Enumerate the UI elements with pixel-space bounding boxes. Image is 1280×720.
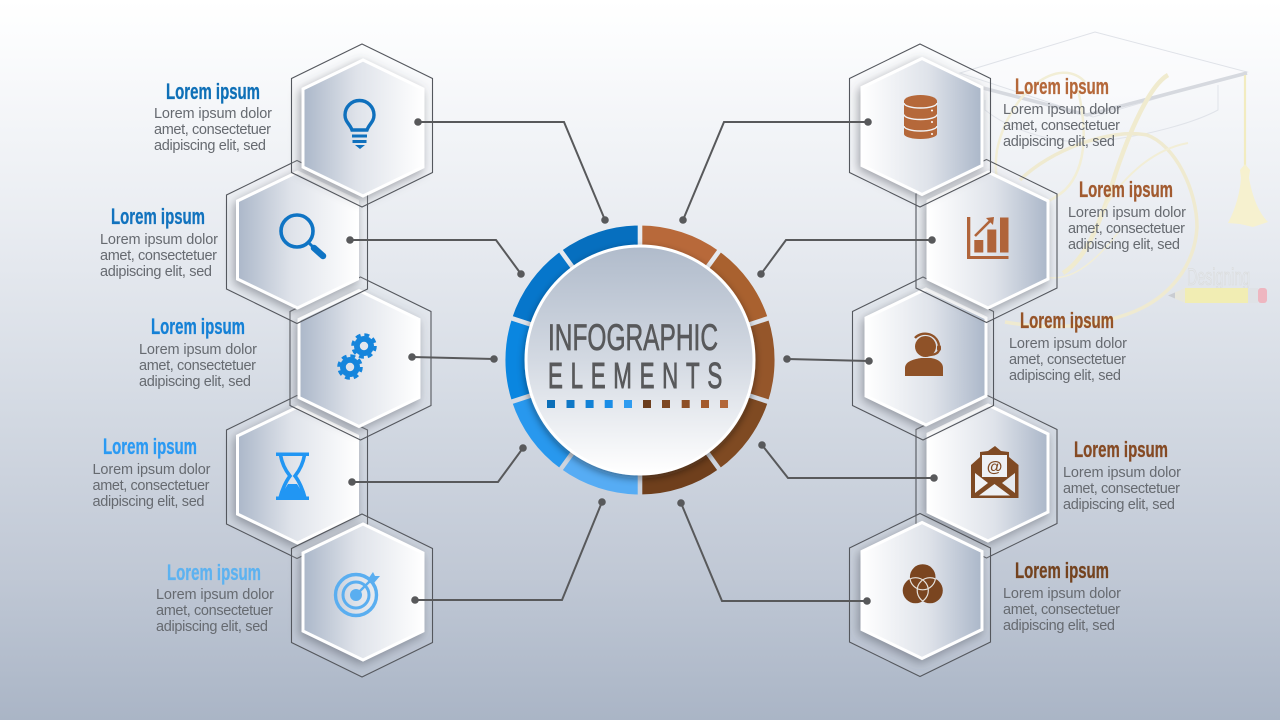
text block: right 5: amet, consectetuer xyxy=(1003,602,1120,618)
text block: right 3: amet, consectetuer xyxy=(1009,352,1126,368)
text block: left 2: Lorem ipsum xyxy=(111,204,205,229)
text block: left 2: adipiscing elit, sed xyxy=(100,264,212,280)
hexagon: right 2 bar chart xyxy=(916,160,1057,322)
connector: left 1 xyxy=(418,122,605,220)
text block: right 1: Lorem ipsum dolor xyxy=(1003,102,1121,118)
hexagon: right 4 email xyxy=(916,395,1057,558)
text block: left 1: Lorem ipsum xyxy=(166,79,260,104)
text block: right 1: amet, consectetuer xyxy=(1003,118,1120,134)
title squares xyxy=(547,400,728,408)
text block: right 4: Lorem ipsum dolor xyxy=(1063,465,1181,481)
icon: bar chart xyxy=(967,217,1008,259)
text block: left 3: amet, consectetuer xyxy=(139,358,256,374)
text block: right 1: adipiscing elit, sed xyxy=(1003,134,1115,150)
text block: right 2: amet, consectetuer xyxy=(1068,221,1185,237)
text block: left 3: adipiscing elit, sed xyxy=(139,374,251,390)
hexagon: right 1 database xyxy=(850,44,990,207)
text block: left 5 xyxy=(156,560,274,635)
connector: right 2 xyxy=(761,240,932,274)
text block: right 5: Lorem ipsum xyxy=(1015,558,1109,583)
watermark: graduation cap, script and pencil xyxy=(960,32,1268,326)
icon: gears xyxy=(339,335,375,378)
icon: venn circles xyxy=(903,564,943,603)
connector: left 5 xyxy=(415,502,602,600)
text block: right 4: amet, consectetuer xyxy=(1063,481,1180,497)
connector: left 4 xyxy=(352,448,523,482)
text block: right 1 xyxy=(1003,74,1121,150)
text block: right 3 xyxy=(1009,308,1127,384)
text block: left 4 xyxy=(92,434,211,510)
text block: right 4 xyxy=(1063,437,1181,513)
text block: left 4: Lorem ipsum xyxy=(103,434,197,459)
text block: left 3 xyxy=(139,314,257,390)
text block: left 5: adipiscing elit, sed xyxy=(156,619,268,635)
icon: magnifier xyxy=(281,215,323,256)
hexagon: left 1 light bulb xyxy=(292,44,432,207)
connector: right 4 xyxy=(762,445,934,478)
text block: left 4: amet, consectetuer xyxy=(92,478,210,494)
text block: right 5: adipiscing elit, sed xyxy=(1003,618,1115,634)
text block: left 2: amet, consectetuer xyxy=(100,248,217,264)
text block: left 2: Lorem ipsum dolor xyxy=(100,232,218,248)
connector: right 1 xyxy=(683,122,868,220)
connectors xyxy=(350,122,934,601)
text block: left 1: amet, consectetuer xyxy=(154,122,271,138)
text block: right 5 xyxy=(1003,558,1121,634)
title xyxy=(548,317,722,396)
text block: right 3: Lorem ipsum xyxy=(1020,308,1114,333)
hexagon: left 3 gears xyxy=(290,277,431,440)
text block: right 1: Lorem ipsum xyxy=(1015,74,1109,99)
icon: hourglass xyxy=(276,452,309,500)
text block: left 2 xyxy=(100,204,218,280)
text block: right 2: adipiscing elit, sed xyxy=(1068,237,1180,253)
text block: left 5: Lorem ipsum xyxy=(167,560,261,585)
connector: left 2 xyxy=(350,240,521,274)
text block: right 2: Lorem ipsum dolor xyxy=(1068,205,1186,221)
text block: right 3: adipiscing elit, sed xyxy=(1009,368,1121,384)
connector: right 3 xyxy=(787,359,869,361)
text block: left 1 xyxy=(154,79,272,154)
central ring xyxy=(516,236,764,484)
central circle xyxy=(526,246,754,474)
icon: target xyxy=(336,572,380,616)
hexagon: left 5 target xyxy=(292,514,432,677)
title: INFOGRAPHIC xyxy=(548,317,718,358)
title: ELEMENTS xyxy=(548,357,722,396)
text block: left 5: amet, consectetuer xyxy=(156,603,273,619)
text block: left 5: Lorem ipsum dolor xyxy=(156,587,274,603)
icon: light bulb xyxy=(345,100,374,149)
text block: left 3: Lorem ipsum xyxy=(151,314,245,339)
connector: left 3 xyxy=(412,357,494,359)
text block: left 1: Lorem ipsum dolor xyxy=(154,106,272,122)
icon: headset agent xyxy=(905,334,943,376)
text block: right 2: Lorem ipsum xyxy=(1079,177,1173,202)
hexagon: right 3 headset agent xyxy=(852,277,994,440)
text block: left 4: Lorem ipsum dolor xyxy=(92,462,211,478)
icon: email envelope: @ xyxy=(987,459,1002,476)
icon: database xyxy=(904,95,937,139)
connector: right 5 xyxy=(681,503,867,601)
text block: left 3: Lorem ipsum dolor xyxy=(139,342,257,358)
text block: right 4: Lorem ipsum xyxy=(1074,437,1168,462)
icon: email envelope xyxy=(971,446,1018,498)
text block: right 2 xyxy=(1068,177,1186,253)
hexagon: right 5 venn xyxy=(850,514,990,676)
hexagon: left 2 magnifier xyxy=(226,160,368,324)
text block: right 5: Lorem ipsum dolor xyxy=(1003,586,1121,602)
text block: right 4: adipiscing elit, sed xyxy=(1063,497,1175,513)
hexagon: left 4 hourglass xyxy=(226,396,368,558)
text block: left 4: adipiscing elit, sed xyxy=(92,494,204,510)
connector dots xyxy=(346,118,938,605)
text block: right 3: Lorem ipsum dolor xyxy=(1009,336,1127,352)
text block: left 1: adipiscing elit, sed xyxy=(154,138,266,154)
